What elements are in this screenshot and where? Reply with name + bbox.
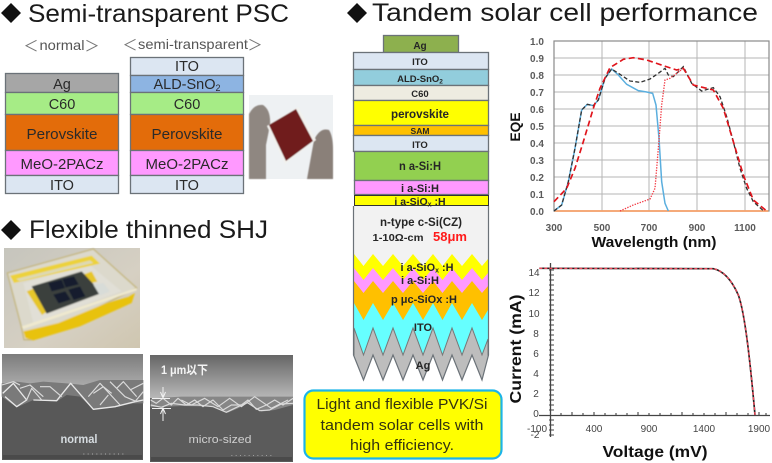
layer labels: 58μm [433, 229, 467, 244]
callout: key message: Light and flexible PVK/Si [316, 396, 488, 413]
layer labels: Ag [416, 360, 430, 372]
SEM image: normal texture: normal [60, 432, 98, 446]
label: normal stack: ＜ [23, 38, 39, 55]
layer labels: x [435, 268, 439, 274]
layer labels: perovskite [391, 107, 449, 121]
diagram: semi-transparent layer stack: C60 [174, 97, 200, 113]
diagram: semi-transparent layer stack: ITO [175, 59, 199, 75]
layer: top Ag electrode [384, 36, 458, 52]
y axis tick labels: 0.0 [530, 207, 544, 218]
diagram: normal layer stack: MeO-2PACz [20, 157, 104, 173]
y axis tick labels: 1.0 [530, 37, 544, 48]
layer labels: p μc-SiOx :H [391, 294, 457, 306]
y axis tick labels [530, 37, 544, 218]
diagram: semi-transparent layer stack: ALD-SnO [153, 77, 216, 93]
y axis tick labels: 0.1 [530, 190, 544, 201]
layer labels: 2 [439, 78, 443, 86]
x axis title: Voltage (mV) [602, 444, 708, 461]
layer labels: C60 [411, 89, 429, 100]
JV curve [539, 268, 755, 415]
y axis tick labels: 8 [533, 329, 539, 340]
y axis tick labels: 0.8 [530, 71, 544, 82]
diagram: semi-transparent layer stack: Perovskite [152, 127, 222, 143]
callout: key message: tandem solar cells with [320, 417, 484, 434]
x axis tick labels [546, 223, 756, 234]
layer labels: ALD-SnO [397, 74, 439, 85]
y axis tick labels: 10 [528, 309, 540, 320]
layer: SAM [354, 126, 488, 136]
chart: EQE versus wavelength [507, 37, 769, 251]
x axis tick labels: 300 [546, 223, 563, 234]
x axis tick labels [527, 424, 771, 435]
layer labels: i a-SiO [394, 196, 428, 208]
y axis tick labels: 14 [528, 268, 540, 279]
photo: semi-transparent cell held in fingers [249, 95, 333, 179]
annotation: feature size: 1 μm以下 [161, 363, 208, 377]
layer labels: ITO [414, 322, 433, 334]
callout: key message: high efficiency. [350, 437, 454, 454]
diagram: tandem cell layer stack [354, 36, 488, 386]
label: semi-transparent stack: ＜ [122, 37, 138, 54]
x axis tick labels: 1900 [748, 424, 771, 435]
diagram: normal layer stack [6, 74, 118, 194]
SEM image: micro-sized texture: micro-sized [188, 434, 252, 446]
y axis tick labels: 6 [533, 349, 539, 360]
y axis title: EQE [507, 112, 523, 142]
x axis tick labels: -100 [527, 424, 547, 435]
layer labels: SAM [411, 126, 429, 136]
x axis tick labels: 500 [594, 223, 611, 234]
diagram: normal layer stack: Perovskite [26, 127, 98, 143]
x axis tick labels: 900 [689, 223, 706, 234]
y axis tick labels: 4 [533, 369, 539, 380]
layer labels: ITO [412, 140, 428, 151]
layer: lower ITO [354, 136, 488, 152]
heading: Semi-transparent PSC: Semi-transparent PSC [28, 0, 289, 28]
layer: i a-Si [354, 180, 488, 194]
y axis tick labels: 0 [533, 409, 539, 420]
y axis tick labels: 0.3 [530, 156, 544, 167]
y axis tick labels: 0.5 [530, 122, 544, 133]
label: normal stack: ＞ [84, 38, 100, 55]
label: semi-transparent stack: semi-transparent [138, 36, 248, 52]
layer: ALD-SnO2 [354, 70, 488, 86]
annotation: size arrows [152, 387, 171, 421]
diagram: semi-transparent layer stack: ITO [175, 178, 199, 194]
callout: key message [304, 390, 502, 458]
diagram: normal layer stack: ITO [50, 178, 74, 194]
layer labels: i a-Si:H [401, 275, 439, 287]
layer labels: i a-Si:H [401, 183, 439, 195]
layer labels: n-type c-Si(CZ) [380, 217, 462, 229]
layer labels: Ag [413, 41, 427, 52]
layer labels: x [428, 202, 432, 208]
layer labels: :H [439, 262, 454, 274]
photo: flexible cell in a yellow-edged tray [4, 248, 140, 348]
x axis tick labels: 700 [641, 223, 658, 234]
label: normal stack: normal [40, 37, 84, 53]
x axis tick labels: 1100 [734, 223, 756, 234]
diagram: normal layer stack: C60 [49, 97, 75, 113]
heading: Flexible thinned SHJ: Flexible thinned SHJ [29, 216, 268, 244]
diagram: normal layer stack: Ag [53, 77, 71, 93]
y axis tick labels: -2 [531, 430, 540, 441]
layer: C60 [354, 86, 488, 100]
textured lower layers [354, 206, 488, 386]
y axis tick labels: 2 [533, 389, 539, 400]
y axis tick labels [528, 268, 540, 441]
label: semi-transparent stack: ＞ [247, 37, 263, 54]
y axis tick labels: 0.6 [530, 105, 544, 116]
SEM image: micro-sized texture [150, 355, 293, 462]
layer labels: i a-SiO [400, 262, 435, 274]
layer labels [372, 41, 467, 372]
x axis tick labels: 900 [641, 424, 658, 435]
layer: i a-SiOx [354, 196, 488, 206]
x axis tick labels: 400 [586, 424, 603, 435]
grid [554, 41, 769, 211]
y axis tick labels: 0.9 [530, 54, 544, 65]
layer labels: n a-Si:H [399, 161, 441, 173]
label: normal stack [23, 37, 100, 55]
axes [539, 263, 770, 437]
layer: perovskite [354, 100, 488, 126]
x axis title: Wavelength (nm) [592, 235, 717, 251]
layer labels: :H [432, 196, 446, 208]
layer: ITO [354, 52, 488, 70]
chart: current versus voltage [508, 263, 771, 461]
diagram: semi-transparent layer stack [130, 58, 244, 194]
SEM image: normal texture [2, 354, 143, 460]
y axis tick labels: 12 [528, 288, 540, 299]
y axis tick labels: 0.2 [530, 173, 544, 184]
layer labels: 1-10Ω-cm [372, 232, 424, 244]
y axis title: Current (mA) [508, 295, 525, 403]
label: semi-transparent stack [122, 36, 263, 54]
layer labels: ITO [412, 57, 428, 68]
x axis tick labels: 1400 [693, 424, 716, 435]
y axis tick labels: 0.4 [530, 139, 544, 150]
diagram: semi-transparent layer stack: 2 [216, 83, 221, 93]
curves [554, 58, 768, 211]
diagram: semi-transparent layer stack: MeO-2PACz [146, 157, 228, 173]
layer: n a-Si [354, 152, 488, 180]
y axis tick labels: 0.7 [530, 88, 544, 99]
